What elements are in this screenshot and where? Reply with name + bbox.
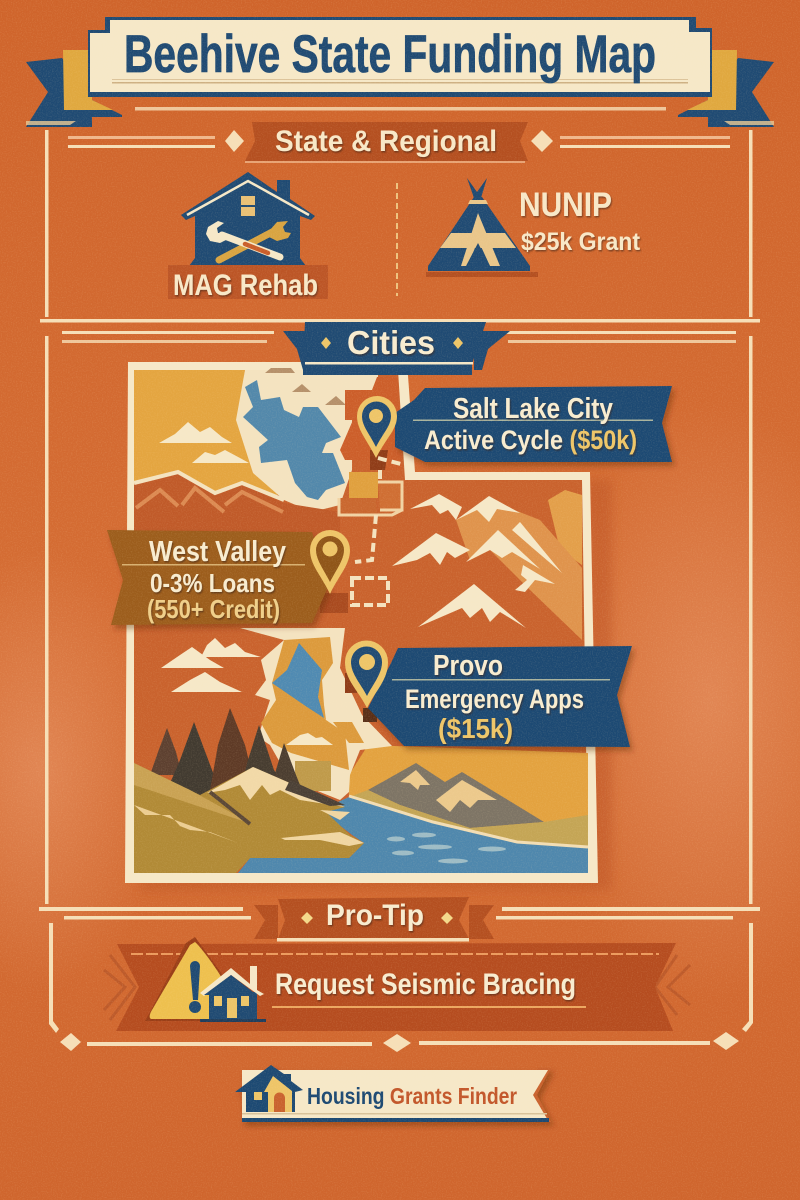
text: grant amount: $25k Grant	[521, 228, 641, 256]
ribbon right tail	[678, 50, 774, 127]
clouds	[159, 422, 583, 788]
loan detail: 0-3% Loans	[150, 568, 275, 598]
south gold region	[349, 745, 588, 848]
wasatch counties	[320, 377, 405, 613]
rust mountains	[134, 472, 340, 540]
banner	[368, 646, 632, 747]
title banner	[26, 17, 774, 127]
river	[238, 796, 588, 873]
pin	[345, 640, 388, 708]
chevrons	[104, 955, 690, 1025]
ribbon left tail	[26, 50, 122, 127]
funding detail: Active Cycle ($50k)	[424, 425, 637, 455]
icon: house with tools	[181, 172, 315, 266]
gold northwest	[134, 370, 284, 500]
footer logo	[235, 1065, 551, 1122]
icon: logo house	[235, 1065, 303, 1112]
section heading: Cities: Cities	[347, 324, 435, 361]
city name: Salt Lake City	[453, 393, 613, 425]
section heading: State & Regional: State & Regional	[275, 125, 497, 158]
small distant peaks	[265, 368, 346, 405]
divider	[396, 183, 398, 296]
banner ribbon	[116, 943, 676, 1031]
amount: ($15k)	[438, 713, 513, 744]
callout: West Valley	[107, 530, 350, 625]
credit detail: (550+ Credit)	[147, 594, 280, 624]
callout: Salt Lake City	[357, 386, 672, 462]
pin	[310, 530, 350, 594]
section heading: Pro-Tip	[254, 897, 494, 942]
olive hills	[134, 763, 364, 873]
banner	[395, 386, 672, 462]
icon: warning with house	[145, 937, 266, 1022]
distant mountains	[349, 763, 588, 848]
pro-tip banner	[104, 937, 690, 1031]
icon: tipi	[426, 178, 538, 277]
map shadow	[140, 480, 612, 890]
title: Beehive State Funding Map	[124, 25, 656, 84]
section heading: Cities	[283, 322, 510, 375]
city name: West Valley	[149, 536, 286, 568]
funding detail: Emergency Apps	[405, 684, 584, 714]
text: NUNIP: NUNIP	[519, 186, 612, 224]
section heading: Pro-Tip: Pro-Tip	[326, 899, 424, 932]
map of Utah	[125, 362, 598, 883]
blue great salt lake	[243, 380, 345, 500]
tip text: Request Seismic Bracing	[275, 968, 576, 1001]
NUNIP item	[426, 178, 641, 277]
central counties	[240, 628, 392, 800]
MAG Rehab item	[168, 172, 328, 302]
trees	[150, 708, 302, 795]
map border	[125, 362, 598, 883]
logo ribbon	[522, 1068, 551, 1122]
logo text: Housing Grants Finder	[307, 1083, 517, 1109]
east peaks	[392, 490, 582, 640]
banner	[107, 530, 328, 625]
city name: Provo	[433, 650, 503, 682]
pin	[357, 396, 397, 458]
label: MAG Rehab: MAG Rehab	[173, 269, 318, 302]
map base	[134, 370, 588, 873]
callout: Provo	[345, 640, 632, 747]
section heading: State & Regional	[225, 122, 553, 162]
banner plate	[88, 17, 712, 97]
cream salt flats	[236, 370, 378, 512]
panel frame lines	[39, 107, 760, 1052]
